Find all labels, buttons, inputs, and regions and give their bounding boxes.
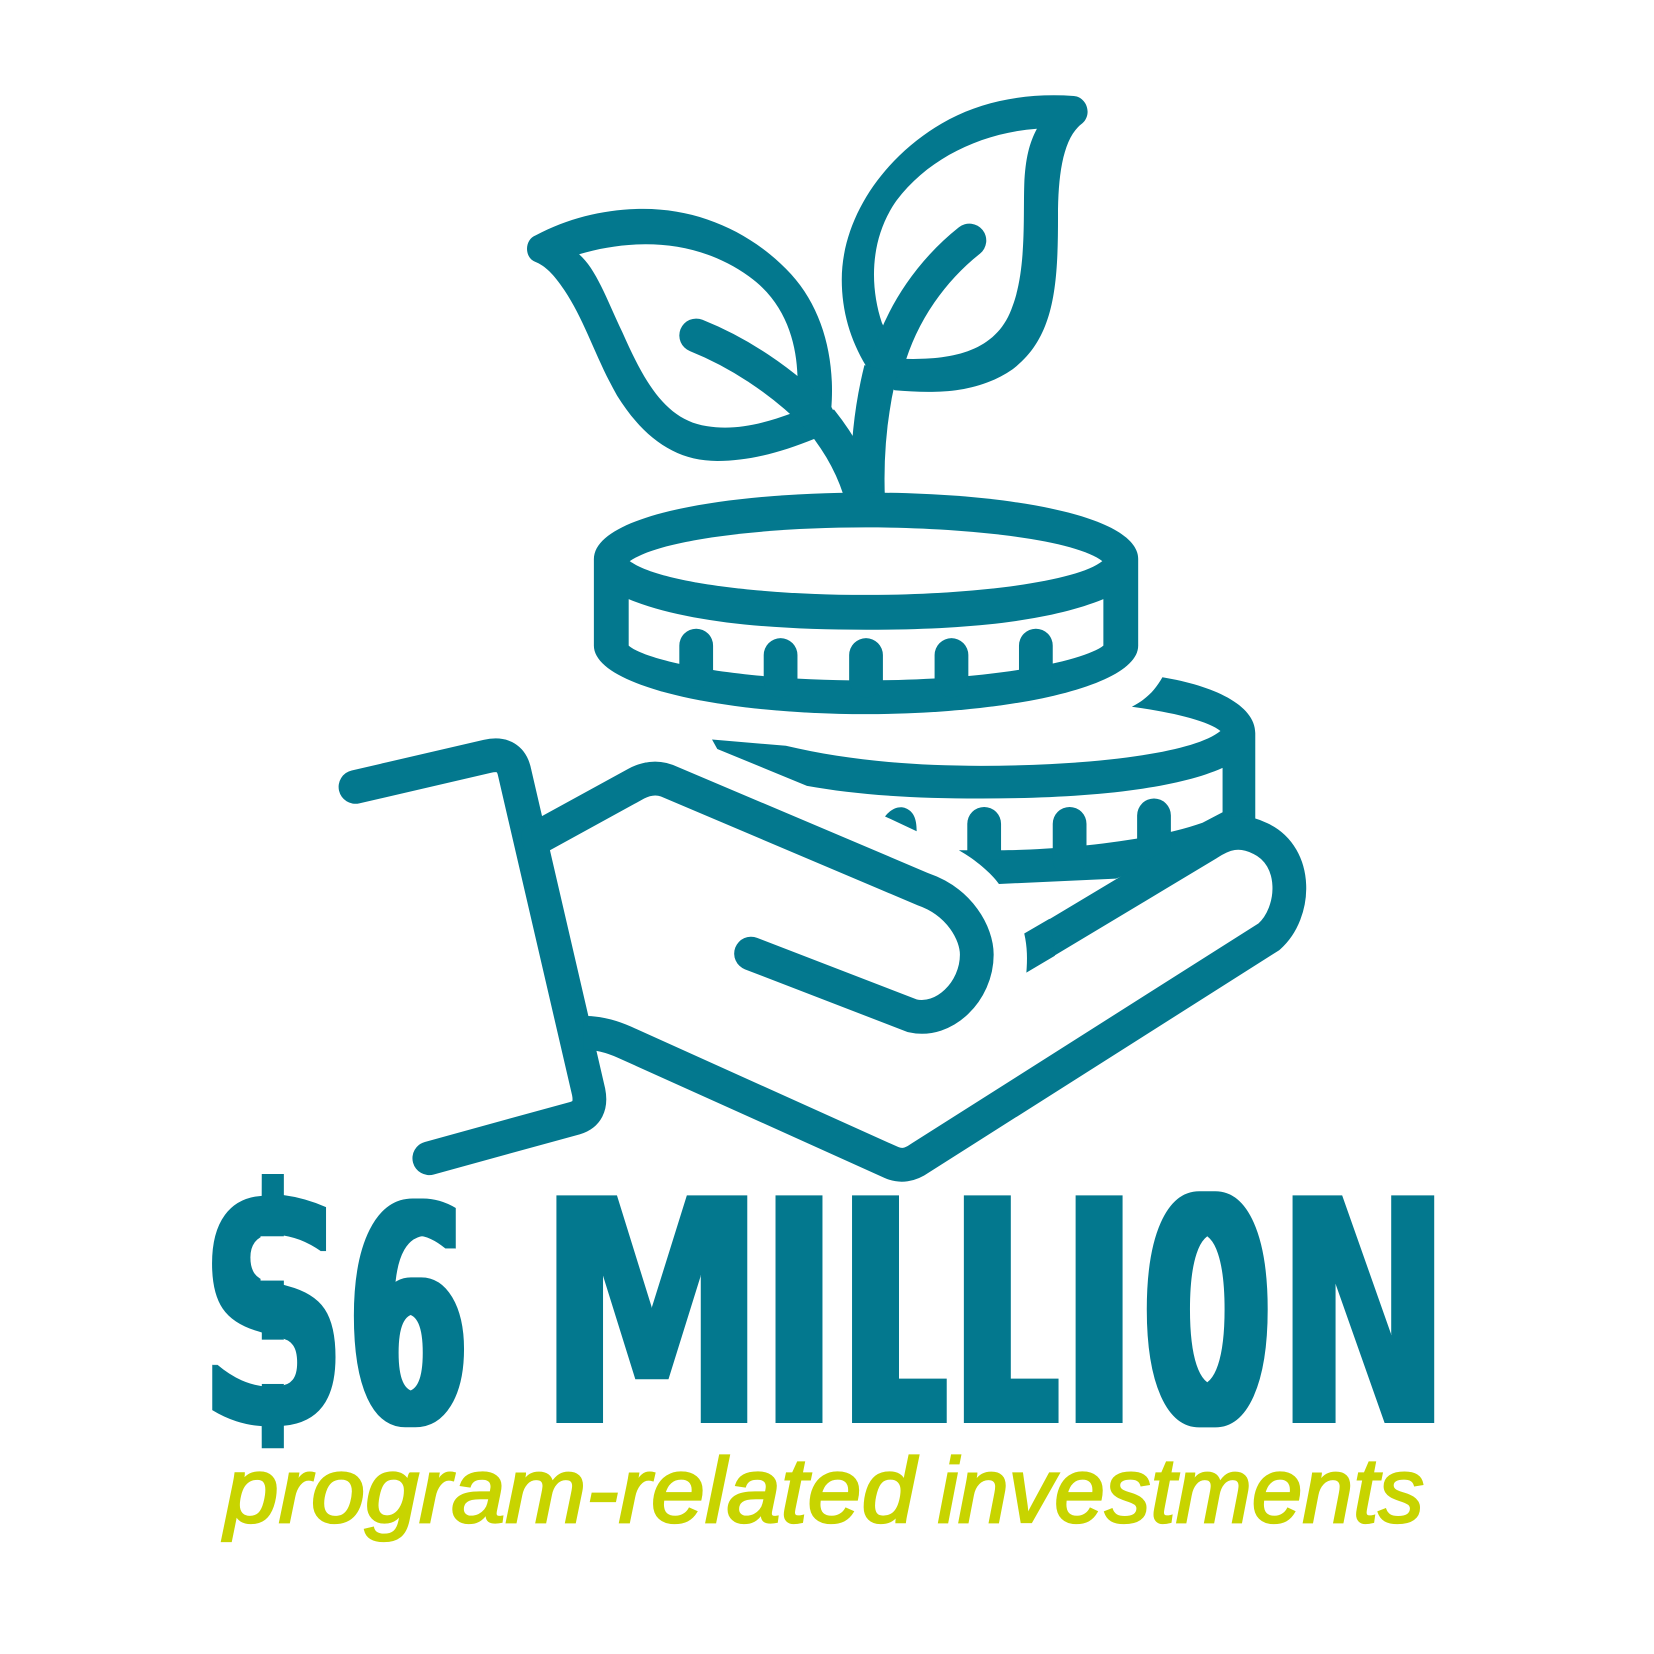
infographic canvas	[212, 95, 1434, 1542]
heading: $6 MILLION: 6	[348, 1143, 468, 1495]
heading: $6 MILLION: L	[941, 1134, 1100, 1497]
heading: $6 MILLION: L	[829, 1134, 988, 1497]
icon: left leaf	[527, 209, 832, 461]
subheading: program-related investments: program-related	[222, 1440, 919, 1542]
icon: palm of hand	[583, 833, 1289, 1165]
icon: cuff of sleeve	[355, 755, 589, 1158]
heading: $6 MILLION: M	[538, 1134, 765, 1497]
subheading: program-related investments: investments	[938, 1440, 1424, 1542]
heading: $6 MILLION: N	[1277, 1133, 1450, 1497]
icon: second coin resting on hand	[712, 677, 1255, 884]
icon: plant growing from coin above hand	[355, 95, 1289, 1165]
heading: $6 MILLION	[212, 1174, 1434, 1448]
heading: $6 MILLION: I	[1053, 1134, 1146, 1497]
heading: $6 MILLION: $	[198, 1097, 348, 1511]
icon: thumb of hand	[538, 779, 977, 1017]
heading: $6 MILLION: O	[1148, 1134, 1267, 1498]
icon: plant stem	[821, 369, 881, 501]
heading: $6 MILLION: I	[753, 1134, 846, 1497]
icon: right leaf	[842, 95, 1088, 392]
subheading: program-related investments	[222, 1440, 1424, 1542]
icon: coin above hand	[594, 493, 1138, 714]
